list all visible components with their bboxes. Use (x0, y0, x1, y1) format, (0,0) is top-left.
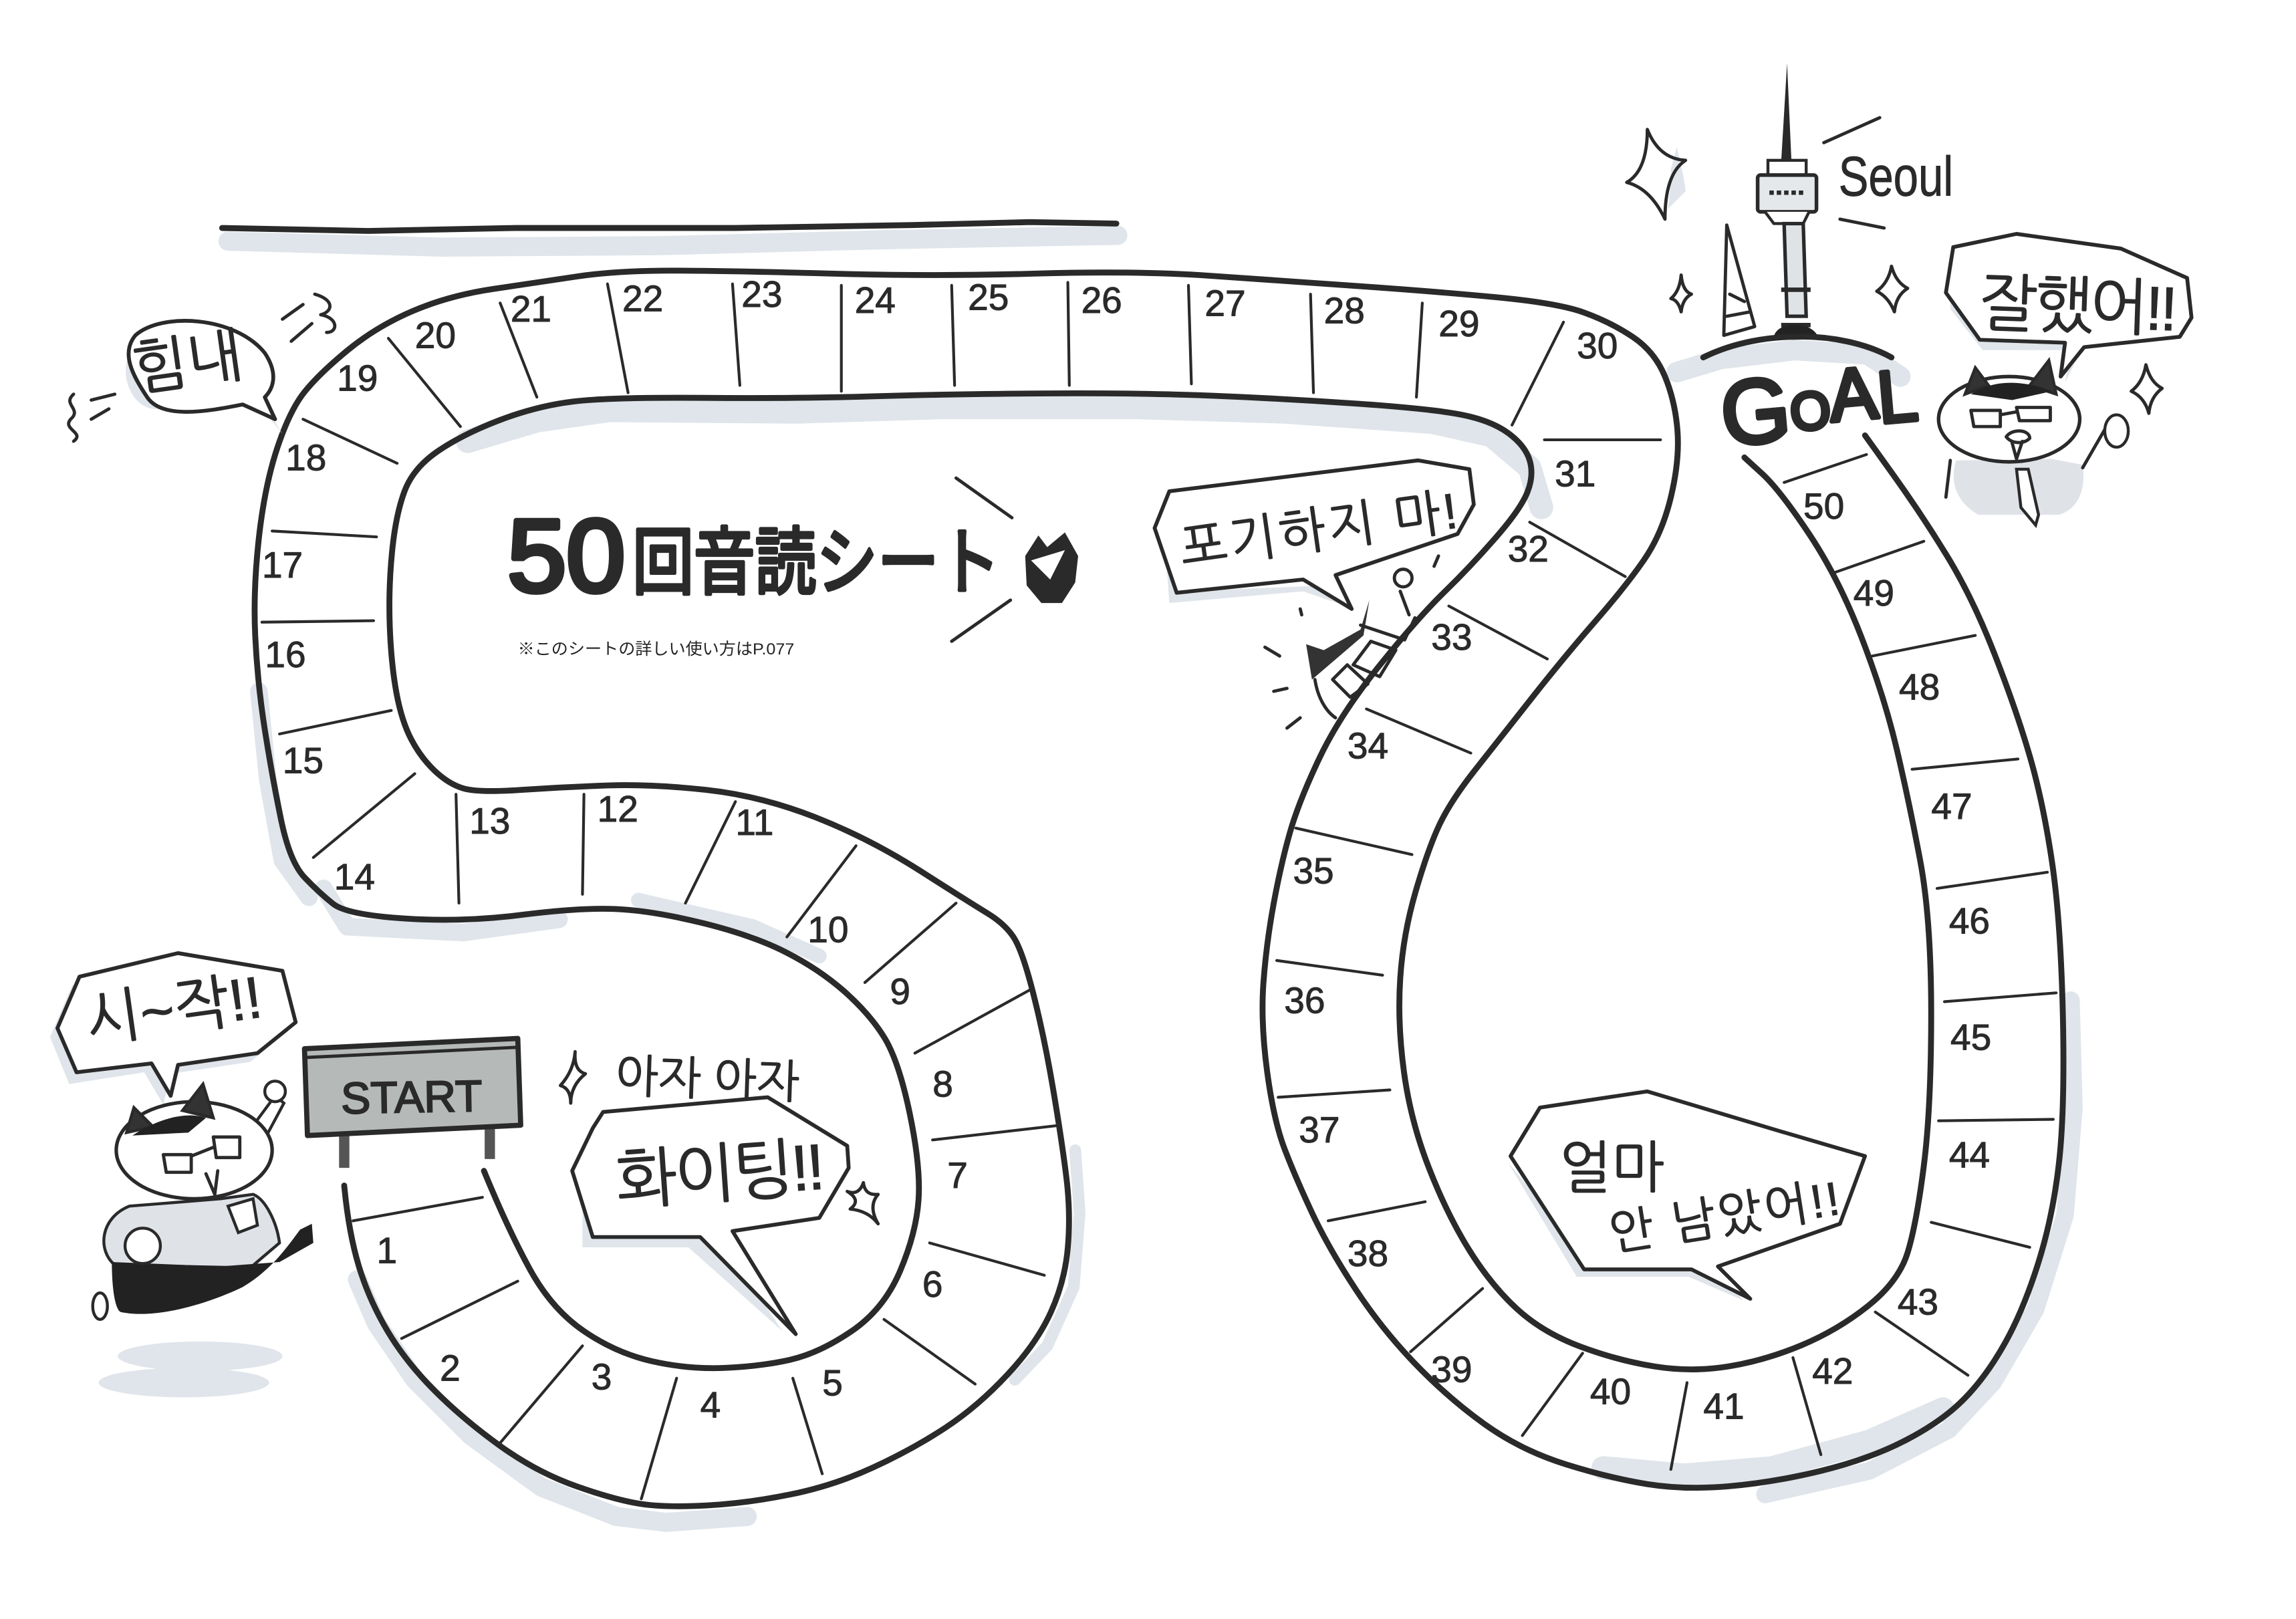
speech bubble: cheer up (126, 321, 283, 434)
title: 50 times reading sheet: 50 (507, 499, 625, 614)
track cell numbers 1 to 50: 9 (890, 971, 910, 1012)
track cell numbers 1 to 50: 48 (1899, 666, 1940, 708)
track cell numbers 1 to 50: 38 (1348, 1233, 1388, 1274)
Seoul label with rays (1824, 118, 1953, 228)
track cell numbers 1 to 50: 47 (1931, 785, 1972, 827)
board game track: outer and inner edges (255, 271, 2063, 1506)
track cell numbers 1 to 50: 36 (1284, 979, 1325, 1021)
track cell numbers 1 to 50: 3 (592, 1356, 612, 1398)
start sign: START (341, 1071, 483, 1123)
track cell numbers 1 to 50: 29 (1438, 303, 1479, 344)
track cell numbers 1 to 50: 50 (1803, 485, 1844, 527)
track cell numbers 1 to 50: 26 (1081, 279, 1122, 321)
track cell numbers 1 to 50: 24 (855, 279, 896, 321)
speech bubble: not much left: 얼마 (1559, 1136, 1664, 1199)
track cell numbers 1 to 50: 21 (511, 288, 551, 330)
track cell numbers 1 to 50: 14 (334, 856, 375, 897)
track cell numbers 1 to 50: 17 (262, 544, 303, 586)
track cell numbers 1 to 50: 4 (700, 1384, 721, 1425)
track cell numbers 1 to 50: 5 (822, 1362, 843, 1403)
icon: title ornament with rays (952, 478, 1078, 641)
track cell numbers 1 to 50: 19 (337, 358, 378, 399)
track cell numbers 1 to 50: 30 (1577, 325, 1618, 366)
track cell numbers 1 to 50: 13 (469, 800, 510, 842)
note about usage: ※このシートの詳しい使い方はP.077 (518, 640, 794, 658)
track cell numbers 1 to 50: 23 (741, 273, 782, 315)
icon: Seoul tower (1724, 64, 1818, 337)
background shadows of the track (228, 235, 2074, 1522)
track cell numbers 1 to 50: 11 (735, 801, 773, 843)
character: cat peeking over track (1265, 556, 1438, 728)
track cell numbers 1 to 50: 45 (1950, 1016, 1991, 1057)
track cell numbers 1 to 50: 8 (932, 1064, 953, 1105)
track cell numbers 1 to 50: 39 (1431, 1349, 1472, 1390)
track cell numbers 1 to 50: 35 (1293, 850, 1334, 892)
character: cat at goal (1938, 360, 2128, 525)
speech bubble: fighting (572, 1098, 849, 1334)
Seoul label with rays: Seoul (1839, 145, 1953, 208)
speech bubble: cheer up: 힘내 (128, 322, 247, 402)
speech bubble: fighting: 화이팅!! (614, 1130, 827, 1217)
track cell numbers 1 to 50: 6 (922, 1263, 942, 1305)
track cell numbers 1 to 50: 42 (1812, 1350, 1853, 1392)
title underline bar (222, 222, 1116, 231)
track cell numbers 1 to 50: 27 (1204, 282, 1246, 324)
goal label: O (1788, 380, 1833, 442)
hill under tower (1703, 337, 1892, 358)
track cell numbers 1 to 50: 32 (1508, 528, 1549, 570)
track cell numbers 1 to 50: 10 (807, 909, 849, 951)
track cell numbers 1 to 50: 20 (415, 315, 456, 356)
track cell numbers 1 to 50: 34 (1348, 725, 1388, 767)
track cell numbers 1 to 50: 15 (283, 740, 324, 781)
track cell numbers 1 to 50: 22 (622, 278, 663, 320)
speech bubble: not much left: 안 남았어!! (1606, 1172, 1843, 1260)
speech bubble: start: 시~작!! (81, 964, 266, 1054)
sparkle icons near cheering text (560, 1051, 878, 1224)
track cell numbers 1 to 50: 2 (440, 1347, 461, 1388)
track cell numbers 1 to 50: 49 (1854, 572, 1894, 614)
sparkle icons around tower (1627, 130, 2162, 413)
motion lines around bubble (69, 294, 335, 441)
character: cat at start (93, 1081, 313, 1397)
track cell numbers 1 to 50: 46 (1949, 900, 1990, 941)
track cell numbers 1 to 50: 31 (1555, 453, 1596, 495)
track cell numbers 1 to 50: 33 (1431, 616, 1472, 658)
track cell numbers 1 to 50: 41 (1703, 1386, 1745, 1427)
speech bubble: not much left (1508, 1092, 1865, 1300)
track cell dividers (262, 282, 2056, 1499)
track cell numbers 1 to 50: 37 (1299, 1109, 1340, 1150)
track cell numbers 1 to 50: 28 (1324, 289, 1365, 331)
track cell numbers 1 to 50: 40 (1590, 1371, 1631, 1412)
track cell numbers 1 to 50: 7 (947, 1154, 968, 1196)
track cell numbers 1 to 50: 25 (968, 276, 1009, 318)
track cell numbers 1 to 50: 44 (1949, 1134, 1990, 1175)
speech bubble: well done: 잘했어!! (1978, 267, 2178, 344)
speech bubble: well done (1946, 234, 2192, 382)
title: 50 times reading sheet (507, 499, 1000, 614)
title: 50 times reading sheet: 回音読シート (632, 522, 1000, 604)
goal label: G (1716, 358, 1795, 465)
track cell numbers 1 to 50: 12 (598, 788, 638, 830)
start sign (305, 1038, 521, 1168)
cheering text: 아자 아자 (614, 1051, 800, 1108)
goal label: A (1825, 352, 1881, 437)
speech bubble: start (50, 953, 295, 1105)
track cell numbers 1 to 50: 16 (265, 634, 306, 675)
speech bubble: do not give up: 포기하지 마! (1176, 483, 1460, 577)
track cell numbers 1 to 50: 1 (376, 1229, 397, 1271)
speech bubble: do not give up (1154, 461, 1474, 609)
goal label: L (1874, 354, 1921, 439)
track cell numbers 1 to 50: 18 (285, 437, 326, 478)
track cell numbers 1 to 50 (262, 273, 1991, 1427)
track cell numbers 1 to 50: 43 (1898, 1281, 1938, 1322)
